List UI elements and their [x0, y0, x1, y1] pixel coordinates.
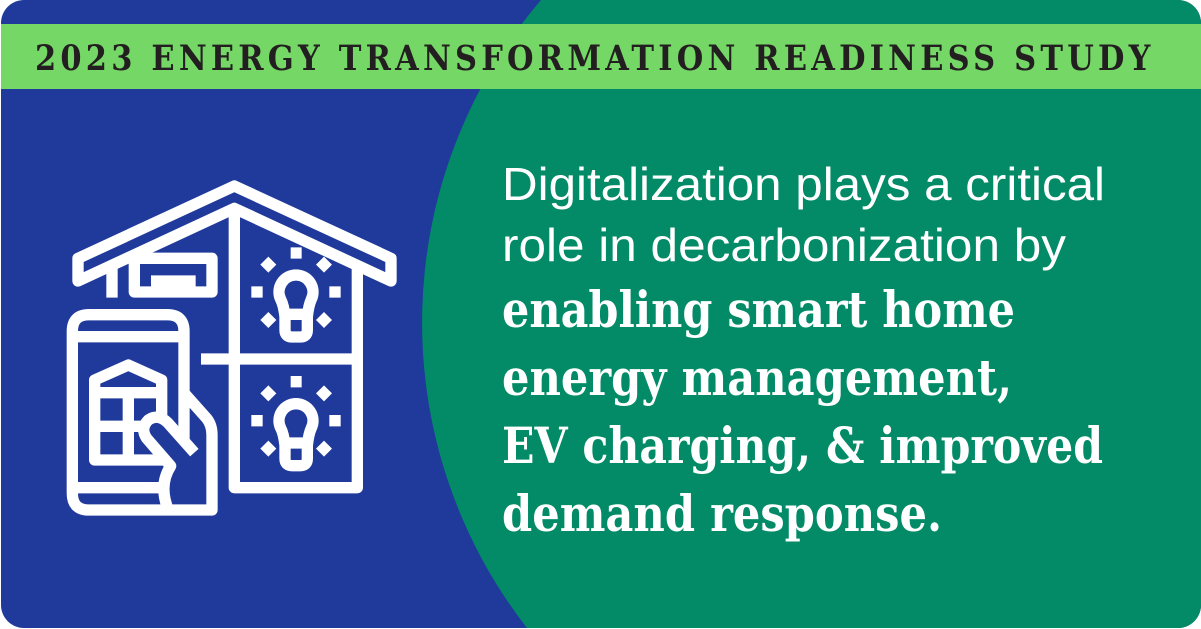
icon: roof window [134, 258, 212, 292]
body text: role in decarbonization by [502, 219, 1066, 271]
header band: 2023 ENERGY TRANSFORMATION READINESS STUDY [35, 37, 1151, 79]
icon: house walls and floor [201, 208, 357, 488]
icon: smart home with phone [72, 186, 391, 510]
bold sentence lines: enabling smart home [502, 280, 1015, 339]
body text: demand response. [502, 484, 942, 543]
icon: lower bulb [251, 376, 341, 466]
icon: finger [144, 417, 194, 510]
icon: phone body [72, 315, 212, 510]
body text: EV charging, & improved [502, 416, 1103, 475]
regular sentence lines: Digitalization plays a critical [502, 158, 1105, 210]
icon: roof [78, 186, 391, 281]
icon: mini house on phone [95, 365, 165, 460]
body text [502, 158, 1105, 543]
icon: chimney stem [95, 267, 129, 298]
body text: energy management, [502, 348, 1012, 407]
header band [1, 24, 1201, 89]
icon: upper bulb [251, 247, 341, 337]
